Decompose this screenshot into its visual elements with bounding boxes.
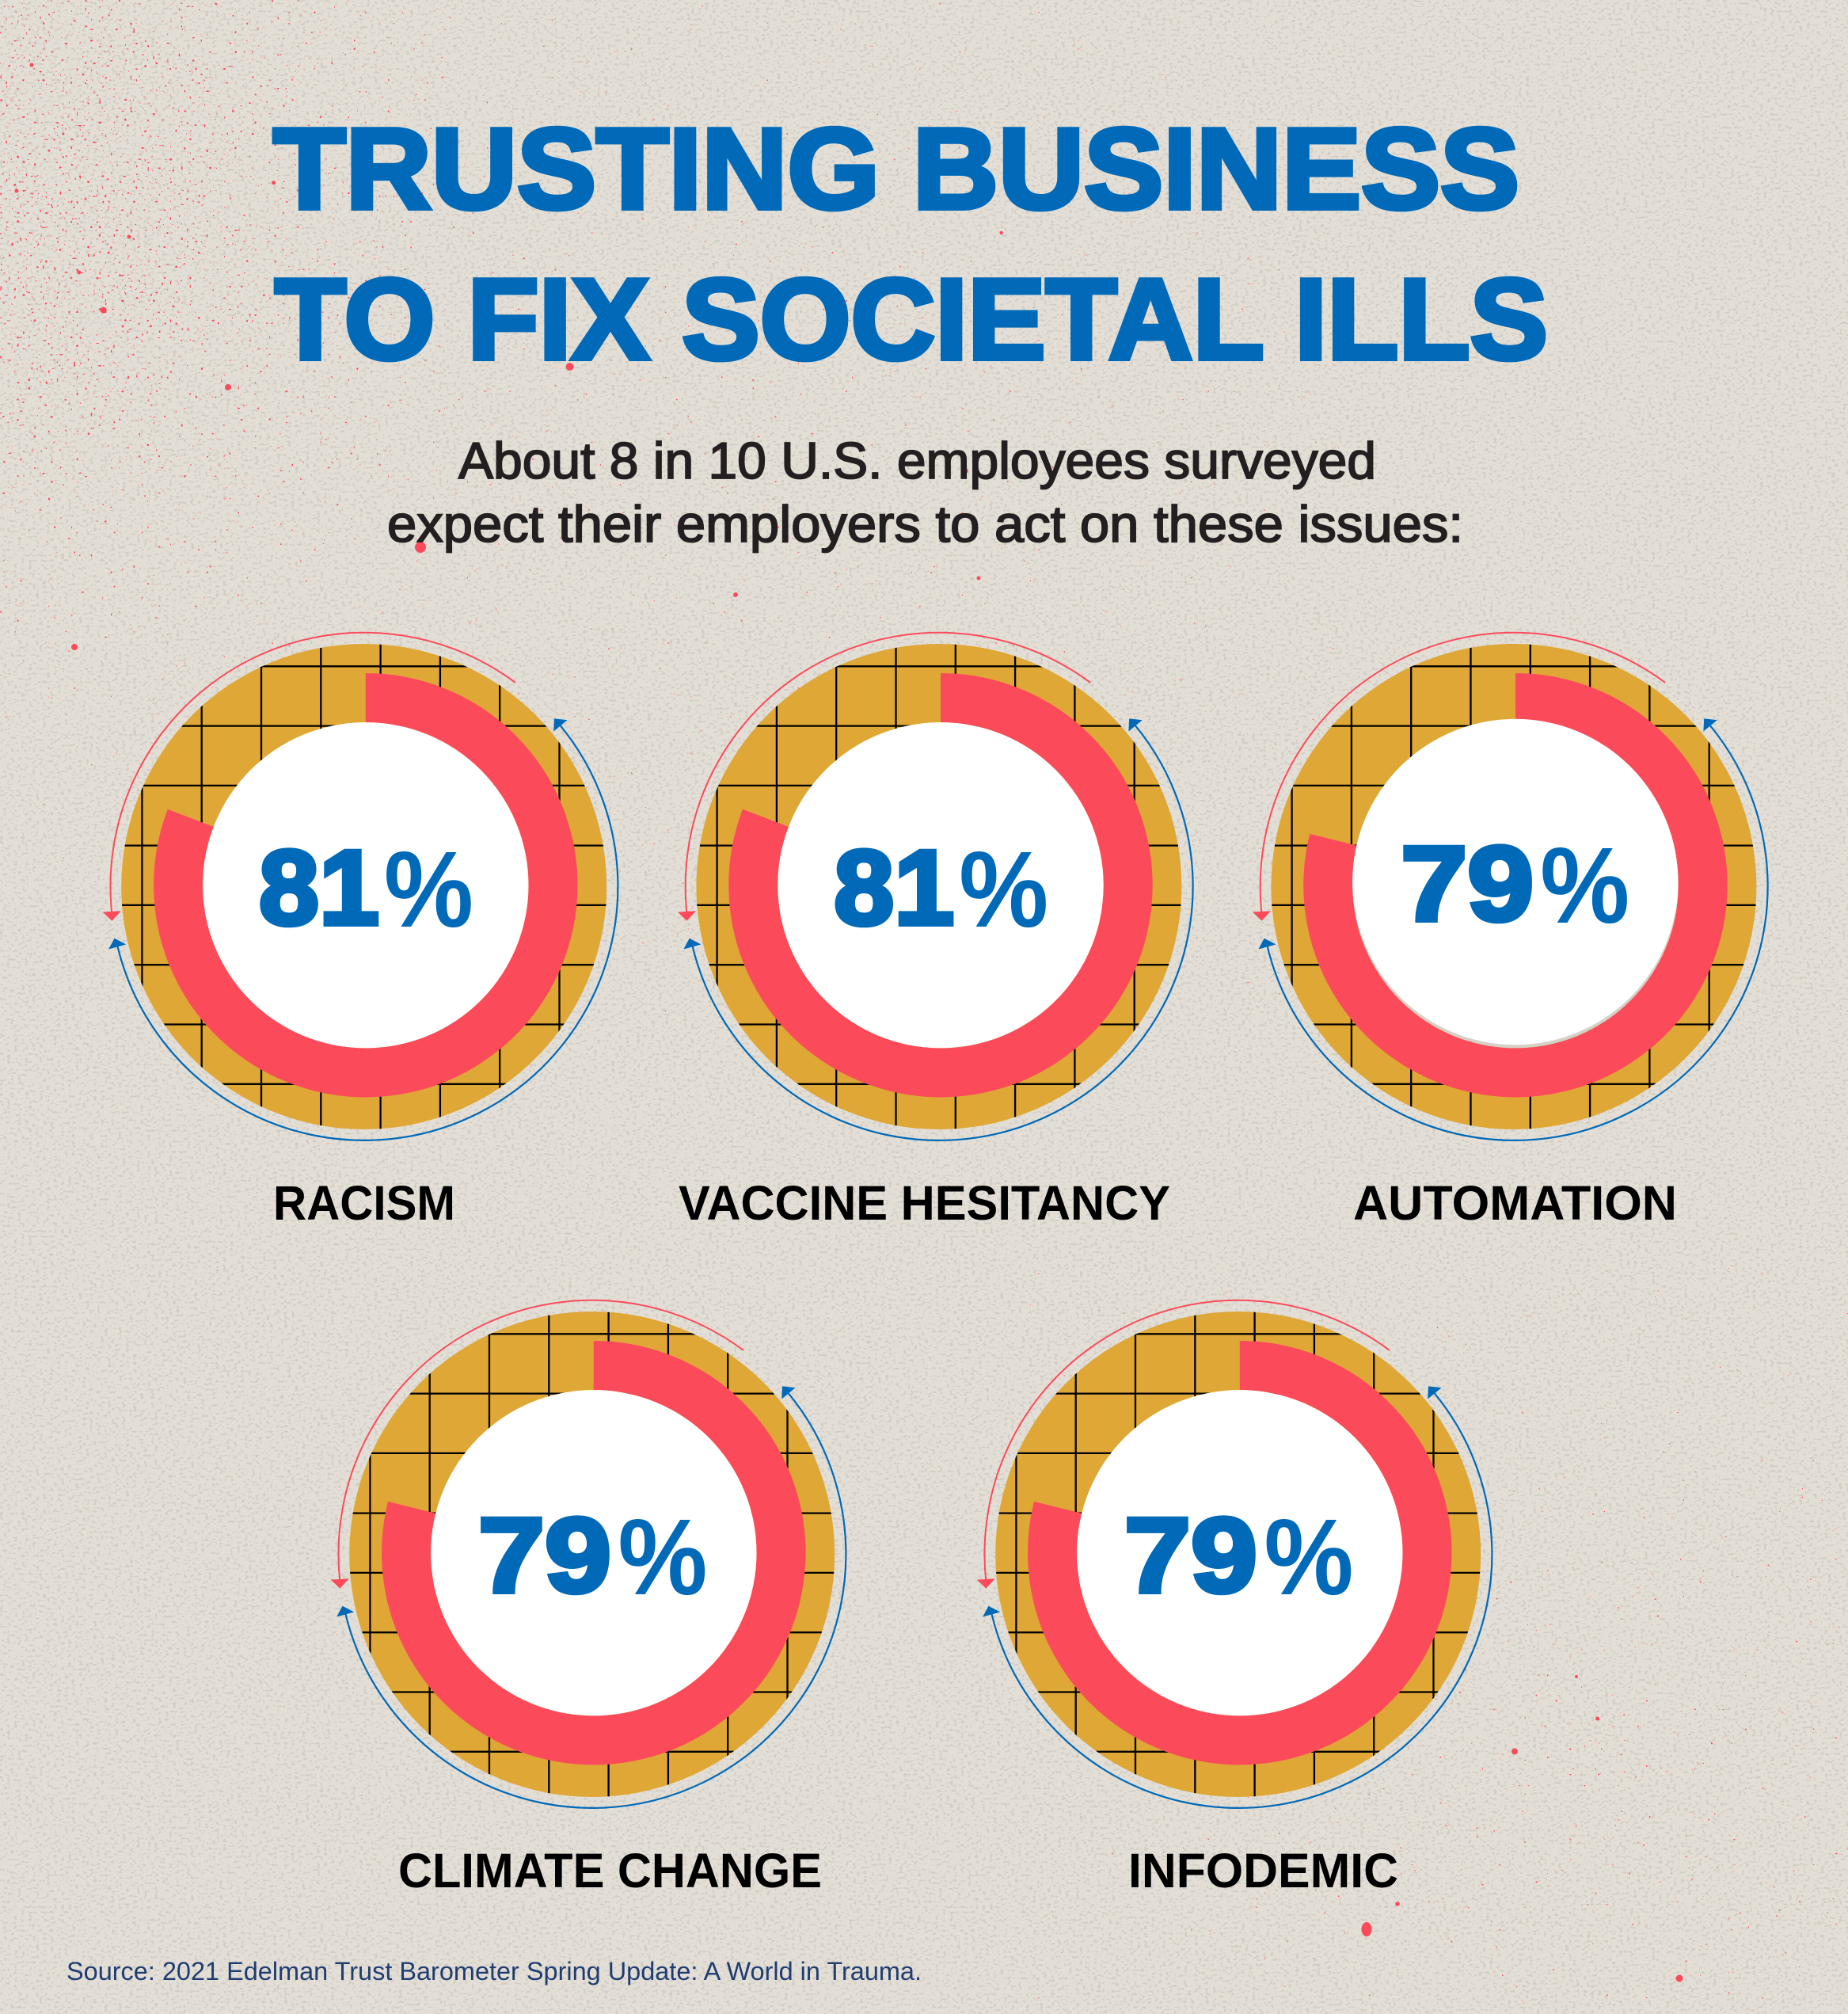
gold disc with grid	[985, 1301, 1492, 1808]
title: TRUSTING BUSINESS	[273, 105, 1519, 233]
red arrow	[678, 633, 1090, 921]
value: 79	[1401, 825, 1534, 943]
red arrow	[1253, 633, 1665, 921]
source note: Source: 2021 Edelman Trust Barometer Spring Update: A World in Trauma.	[67, 1957, 922, 1985]
label: vaccine hesitancy: VACCINE HESITANCY	[679, 1176, 1170, 1230]
value: 79	[1124, 1497, 1257, 1615]
title	[273, 105, 1548, 383]
blue arrow	[983, 1386, 1492, 1808]
red ring 81%	[753, 698, 1128, 1072]
red arrow	[103, 633, 515, 921]
blue arrow	[108, 718, 618, 1140]
gold disc with grid	[1261, 634, 1767, 1140]
label: automation: AUTOMATION	[1353, 1176, 1677, 1230]
gold disc with grid	[339, 1301, 846, 1808]
donut: automation 79%	[1253, 633, 1768, 1140]
red ring 79%	[406, 1365, 781, 1740]
white centre	[431, 1390, 757, 1715]
value: %	[618, 1496, 708, 1617]
value	[1401, 824, 1629, 946]
value	[834, 828, 1048, 950]
label: climate change: CLIMATE CHANGE	[398, 1844, 822, 1898]
value: 79	[478, 1497, 611, 1615]
donut: climate change 79%	[331, 1300, 846, 1808]
value: 81	[259, 829, 379, 947]
subtitle: expect their employers to act on these issues:	[387, 495, 1463, 553]
value	[259, 828, 473, 950]
gold disc with grid	[686, 634, 1192, 1140]
value: %	[1264, 1496, 1354, 1617]
value: %	[1540, 824, 1629, 946]
value: 81	[834, 829, 954, 947]
label: racism: RACISM	[273, 1176, 455, 1230]
white centre	[1077, 1390, 1403, 1715]
blue arrow	[683, 718, 1193, 1140]
subtitle: About 8 in 10 U.S. employees surveyed	[458, 432, 1376, 489]
red ring 79%	[1328, 698, 1703, 1072]
donut: vaccine hesitancy 81%	[678, 633, 1193, 1140]
blue arrow	[1258, 718, 1768, 1140]
label: infodemic: INFODEMIC	[1128, 1844, 1398, 1898]
title: TO FIX SOCIETAL ILLS	[275, 255, 1548, 383]
subtitle	[387, 432, 1463, 553]
donut: infodemic 79%	[977, 1300, 1492, 1808]
gold disc with grid	[111, 634, 618, 1140]
value: %	[959, 828, 1048, 950]
donut: racism 81%	[103, 633, 618, 1140]
value	[478, 1496, 708, 1617]
red ring 79%	[1052, 1365, 1427, 1740]
white centre	[203, 722, 529, 1048]
red arrow	[331, 1300, 743, 1589]
white centre	[778, 722, 1104, 1048]
value: %	[384, 828, 473, 950]
value	[1124, 1496, 1354, 1617]
red ring 81%	[178, 698, 553, 1072]
blue arrow	[337, 1386, 846, 1808]
white centre with shadow crescent	[1352, 719, 1679, 1048]
red arrow	[977, 1300, 1390, 1589]
